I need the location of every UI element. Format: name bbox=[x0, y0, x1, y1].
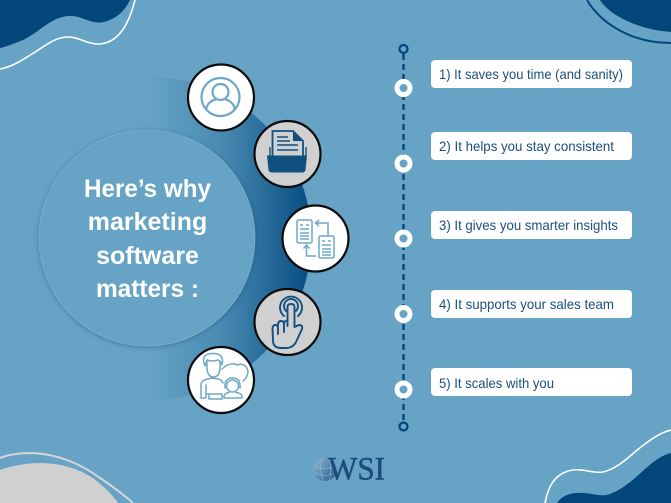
decoration: bottom-left blob bbox=[0, 453, 133, 503]
item 5: 5) It scales with you bbox=[439, 375, 554, 391]
icon: family bbox=[188, 347, 254, 413]
timeline node 2 bbox=[397, 157, 410, 170]
heading: Here’s why bbox=[84, 175, 211, 203]
logo: WSI: WSI bbox=[328, 452, 385, 488]
item 3: 3) It gives you smarter insights bbox=[439, 217, 618, 233]
timeline bbox=[397, 45, 410, 430]
item 2 bbox=[431, 132, 632, 160]
item 5 bbox=[431, 368, 632, 396]
timeline start ring bbox=[400, 45, 408, 53]
icon: hand tapping bbox=[254, 289, 320, 355]
item 2: 2) It helps you stay consistent bbox=[439, 138, 614, 154]
item 4: 4) It supports your sales team bbox=[439, 296, 614, 312]
heading: marketing bbox=[88, 208, 207, 236]
icon: folder with documents bbox=[254, 121, 320, 187]
item 1: 1) It saves you time (and sanity) bbox=[439, 66, 623, 82]
decoration: top-right blob bbox=[587, 0, 671, 43]
main circle with heading bbox=[39, 130, 255, 346]
heading: matters : bbox=[96, 275, 199, 303]
item 4 bbox=[431, 290, 632, 318]
heading: software bbox=[96, 242, 199, 270]
icon: documents exchange bbox=[282, 206, 348, 272]
timeline end ring bbox=[400, 422, 408, 430]
item 1 bbox=[431, 60, 632, 88]
timeline node 5 bbox=[397, 383, 410, 396]
decoration: top-left wave bbox=[0, 0, 135, 69]
timeline node 4 bbox=[397, 308, 410, 320]
heading bbox=[84, 175, 211, 303]
decoration: bottom-right wave bbox=[545, 430, 671, 503]
timeline node 1 bbox=[397, 82, 410, 94]
icon: person bbox=[188, 64, 254, 130]
gradient crescent behind main circle bbox=[150, 77, 311, 400]
item 3 bbox=[431, 211, 632, 239]
timeline node 3 bbox=[397, 232, 410, 245]
